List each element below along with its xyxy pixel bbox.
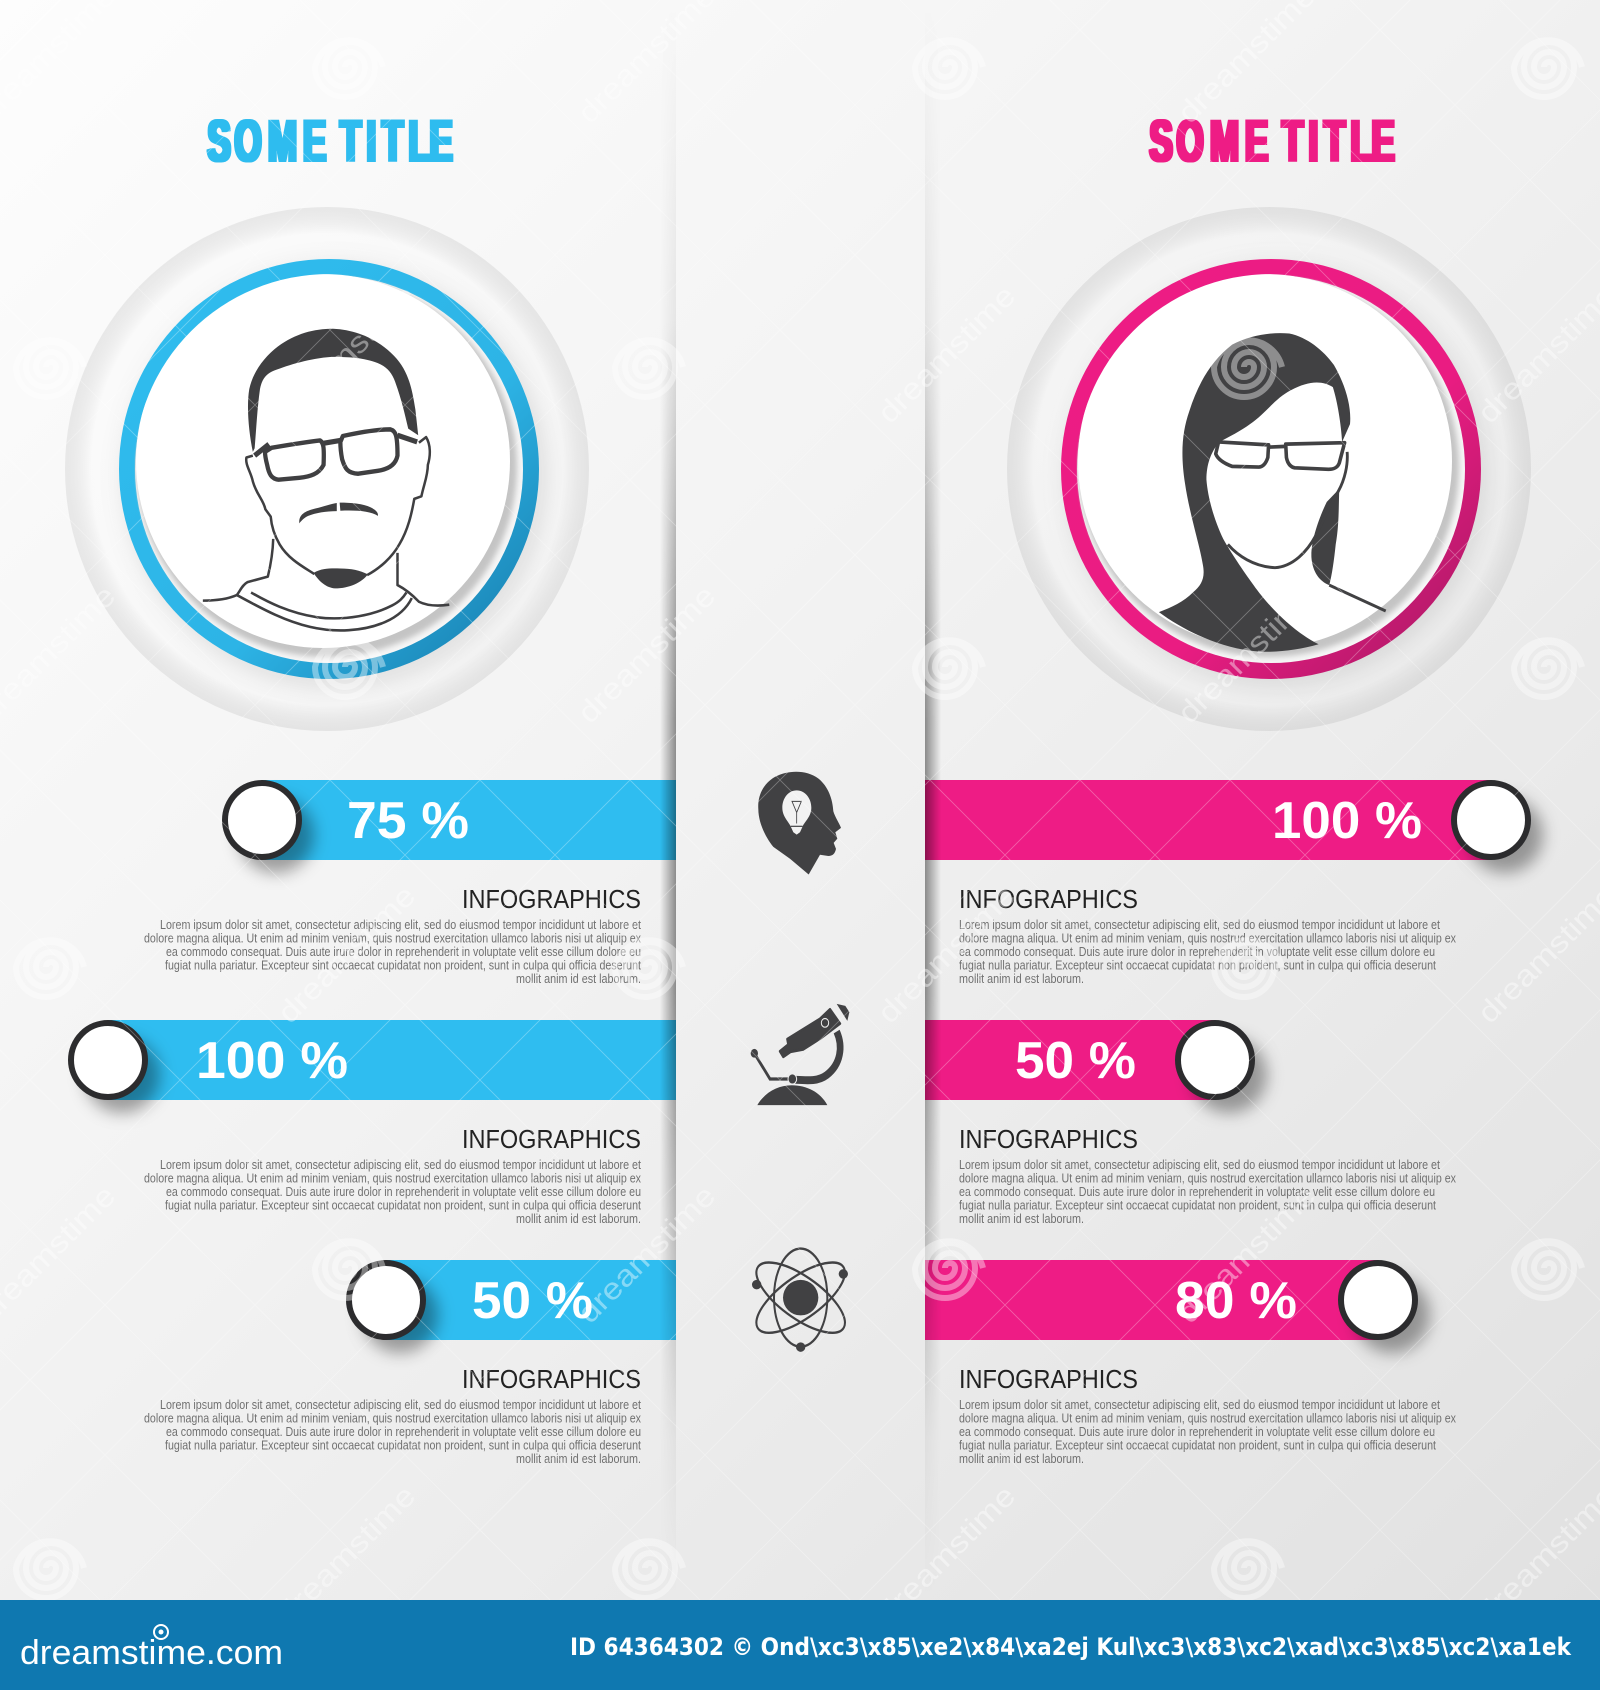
text block: right row 1 xyxy=(959,884,1457,986)
bar: right 100 percent xyxy=(925,780,1543,873)
text block: left row 2: Lorem ipsum dolor sit amet, consectetur adipiscing elit, sed do eiusmod tempor incididunt ut labore et xyxy=(160,1158,641,1172)
text block: right row 3: ea commodo consequat. Duis aute irure dolor in reprehenderit in voluptate velit esse cillum dolore eu xyxy=(959,1425,1435,1439)
bar: left 50 percent xyxy=(349,1260,676,1353)
text block: left row 1: dolore magna aliqua. Ut enim ad minim veniam, quis nostrud exercitation ullamco laboris nisi ut aliquip ex xyxy=(144,932,642,946)
text block: right row 3: Lorem ipsum dolor sit amet, consectetur adipiscing elit, sed do eiusmod tempor incididunt ut labore et xyxy=(959,1398,1440,1412)
watermark overlay: dreamstime xyxy=(272,879,422,1030)
text block: right row 2 xyxy=(959,1124,1457,1226)
text block: right row 1: dolore magna aliqua. Ut enim ad minim veniam, quis nostrud exercitation ullamco laboris nisi ut aliquip ex xyxy=(959,932,1457,946)
footer bar xyxy=(0,1600,1600,1690)
right title: SOME TITLE xyxy=(1149,110,1395,174)
bar: left 50 percent: 50 % xyxy=(472,1272,593,1330)
bar: left 75 percent xyxy=(225,780,676,873)
icon: microscope xyxy=(751,1004,849,1105)
icon: man portrait xyxy=(203,329,449,630)
left title: SOME TITLE xyxy=(207,110,453,174)
text block: right row 2: dolore magna aliqua. Ut enim ad minim veniam, quis nostrud exercitation ullamco laboris nisi ut aliquip ex xyxy=(959,1172,1457,1186)
text block: right row 2: mollit anim id est laborum. xyxy=(959,1212,1084,1226)
text block: left row 3: dolore magna aliqua. Ut enim ad minim veniam, quis nostrud exercitation ullamco laboris nisi ut aliquip ex xyxy=(144,1412,642,1426)
text block: right row 3: fugiat nulla pariatur. Excepteur sint occaecat cupidatat non proident, sunt in culpa qui officia deserunt xyxy=(959,1438,1436,1452)
right avatar badge xyxy=(1007,207,1531,731)
bar: right 50 percent xyxy=(925,1020,1267,1113)
text block: left row 1: INFOGRAPHICS xyxy=(462,884,641,914)
text block: right row 3: mollit anim id est laborum. xyxy=(959,1452,1084,1466)
footer logo: dreamstime.com xyxy=(20,1634,283,1672)
text block: left row 2 xyxy=(144,1124,642,1226)
watermark overlay: dreamstime xyxy=(872,879,1022,1030)
icon: woman portrait xyxy=(1159,333,1386,652)
text block: left row 2: ea commodo consequat. Duis aute irure dolor in reprehenderit in voluptate velit esse cillum dolore eu xyxy=(166,1185,641,1199)
text block: left row 2: mollit anim id est laborum. xyxy=(516,1212,641,1226)
text block: left row 2: fugiat nulla pariatur. Excepteur sint occaecat cupidatat non proident, sunt in culpa qui officia deserunt xyxy=(165,1198,641,1212)
watermark overlay: dreamstime xyxy=(272,279,422,430)
text block: right row 1: Lorem ipsum dolor sit amet, consectetur adipiscing elit, sed do eiusmod tempor incididunt ut labore et xyxy=(959,918,1440,932)
bar: left 100 percent: 100 % xyxy=(196,1032,348,1090)
left avatar badge xyxy=(65,207,589,731)
text block: left row 3: INFOGRAPHICS xyxy=(462,1364,641,1394)
panel: right bars xyxy=(925,780,1543,1353)
text block: right row 1: mollit anim id est laborum. xyxy=(959,972,1084,986)
text block: left row 1: ea commodo consequat. Duis aute irure dolor in reprehenderit in voluptate velit esse cillum dolore eu xyxy=(166,945,641,959)
text block: right row 2: Lorem ipsum dolor sit amet, consectetur adipiscing elit, sed do eiusmod tempor incididunt ut labore et xyxy=(959,1158,1440,1172)
center icons xyxy=(748,772,853,1352)
text block: left row 1 xyxy=(144,884,642,986)
text block: left row 1: fugiat nulla pariatur. Excepteur sint occaecat cupidatat non proident, sunt in culpa qui officia deserunt xyxy=(165,958,641,972)
bar: right 80 percent xyxy=(925,1260,1430,1353)
watermark overlay: dreamstime xyxy=(272,1479,422,1630)
bar: right 100 percent: 100 % xyxy=(1272,792,1422,850)
text block: left row 3: fugiat nulla pariatur. Excepteur sint occaecat cupidatat non proident, sunt in culpa qui officia deserunt xyxy=(165,1438,641,1452)
text block: left row 1: mollit anim id est laborum. xyxy=(516,972,641,986)
bar: left 100 percent xyxy=(71,1020,676,1113)
watermark overlay: dreamstime xyxy=(572,1179,722,1330)
watermark overlay: dreamstime xyxy=(872,1479,1022,1630)
bar: right 50 percent: 50 % xyxy=(1015,1032,1136,1090)
text block: right row 3: INFOGRAPHICS xyxy=(959,1364,1138,1394)
text block: left row 2: INFOGRAPHICS xyxy=(462,1124,641,1154)
text block: right row 3 xyxy=(959,1364,1457,1466)
watermark overlay: dreamstime xyxy=(572,579,722,730)
text block: left row 1: Lorem ipsum dolor sit amet, consectetur adipiscing elit, sed do eiusmod tempor incididunt ut labore et xyxy=(160,918,641,932)
text block: left row 3: mollit anim id est laborum. xyxy=(516,1452,641,1466)
watermark overlay: dreamstime xyxy=(872,279,1022,430)
text block: right row 2: INFOGRAPHICS xyxy=(959,1124,1138,1154)
bar: right 80 percent: 80 % xyxy=(1175,1272,1297,1330)
bar: left 75 percent: 75 % xyxy=(347,792,469,850)
watermark overlay: dreamstime xyxy=(1172,1179,1322,1330)
icon: head with light bulb xyxy=(758,772,841,875)
text block: right row 1: INFOGRAPHICS xyxy=(959,884,1138,914)
center panel edge shadows xyxy=(662,172,940,1472)
text block: left row 2: dolore magna aliqua. Ut enim ad minim veniam, quis nostrud exercitation ullamco laboris nisi ut aliquip ex xyxy=(144,1172,642,1186)
text block: left row 3: ea commodo consequat. Duis aute irure dolor in reprehenderit in voluptate velit esse cillum dolore eu xyxy=(166,1425,641,1439)
text block: left row 3 xyxy=(144,1364,642,1466)
text block: left row 3: Lorem ipsum dolor sit amet, consectetur adipiscing elit, sed do eiusmod tempor incididunt ut labore et xyxy=(160,1398,641,1412)
text block: right row 1: fugiat nulla pariatur. Excepteur sint occaecat cupidatat non proident, sunt in culpa qui officia deserunt xyxy=(959,958,1436,972)
watermark overlay: dreamstime xyxy=(1172,579,1322,730)
icon: atom xyxy=(748,1249,853,1352)
text block: right row 2: fugiat nulla pariatur. Excepteur sint occaecat cupidatat non proident, sunt in culpa qui officia deserunt xyxy=(959,1198,1436,1212)
text block: right row 1: ea commodo consequat. Duis aute irure dolor in reprehenderit in voluptate velit esse cillum dolore eu xyxy=(959,945,1435,959)
text block: right row 2: ea commodo consequat. Duis aute irure dolor in reprehenderit in voluptate velit esse cillum dolore eu xyxy=(959,1185,1435,1199)
text block: right row 3: dolore magna aliqua. Ut enim ad minim veniam, quis nostrud exercitation ullamco laboris nisi ut aliquip ex xyxy=(959,1412,1457,1426)
panel: left bars xyxy=(71,780,676,1353)
